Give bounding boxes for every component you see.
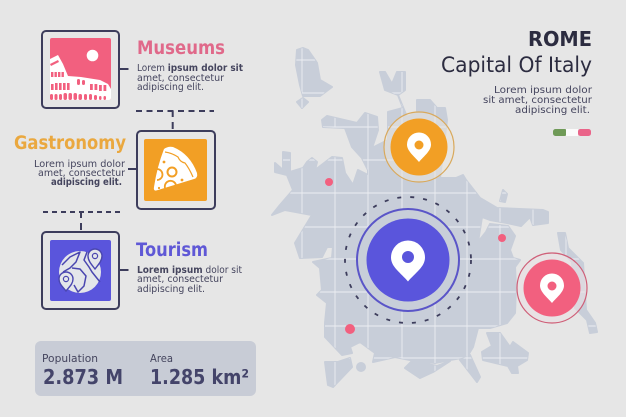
text: museums: amet, consectetur: [137, 73, 225, 84]
panel: statistics: [35, 341, 256, 396]
panel: tourism icon: [42, 232, 119, 309]
text: tourism: [137, 265, 242, 295]
intro text: [483, 85, 593, 116]
subtitle: Capital Of Italy: [441, 53, 592, 77]
pin: orange: [384, 112, 454, 182]
pin: pink: [517, 253, 587, 323]
panel: museums icon: [42, 31, 119, 108]
value: area: 1.285 km²: [150, 365, 249, 389]
map dots: [325, 178, 506, 334]
text: museums: [137, 63, 243, 93]
text: gastronomy: amet, consectetur: [38, 168, 126, 179]
heading: Museums: Museums: [137, 38, 225, 59]
panel: gastronomy icon: [137, 131, 215, 209]
text: museums: Lorem ipsum dolor sit: [137, 63, 243, 74]
heading: Tourism: Tourism: [136, 240, 208, 261]
heading: Gastronomy: Gastronomy: [14, 133, 126, 154]
intro text: Lorem ipsum dolor: [494, 85, 593, 96]
text: gastronomy: [34, 159, 126, 188]
connector: museums: [120, 68, 128, 70]
Italian flag: [553, 129, 591, 136]
text: tourism: adipiscing elit.: [137, 284, 205, 295]
label: population: Population: [42, 353, 98, 365]
label: area: Area: [150, 353, 173, 365]
title: ROME: ROME: [528, 27, 592, 51]
text: gastronomy: adipiscing elit.: [51, 177, 122, 188]
map of Rome: [270, 45, 600, 390]
pin: blue: [345, 197, 471, 323]
connector: tourism: [120, 269, 128, 271]
text: tourism: Lorem ipsum dolor sit: [137, 265, 242, 276]
connector: gastronomy: [128, 168, 136, 170]
intro text: sit amet, consectetur: [483, 95, 593, 106]
value: population: 2.873 M: [43, 365, 123, 389]
text: museums: adipiscing elit.: [137, 82, 204, 93]
dashed connector: museums to gastronomy: [136, 111, 214, 129]
text: tourism: amet, consectetur: [137, 274, 224, 285]
text: gastronomy: Lorem ipsum dolor: [34, 159, 126, 170]
dashed connector: gastronomy to tourism: [43, 212, 124, 230]
intro text: adipiscing elit.: [515, 105, 590, 116]
